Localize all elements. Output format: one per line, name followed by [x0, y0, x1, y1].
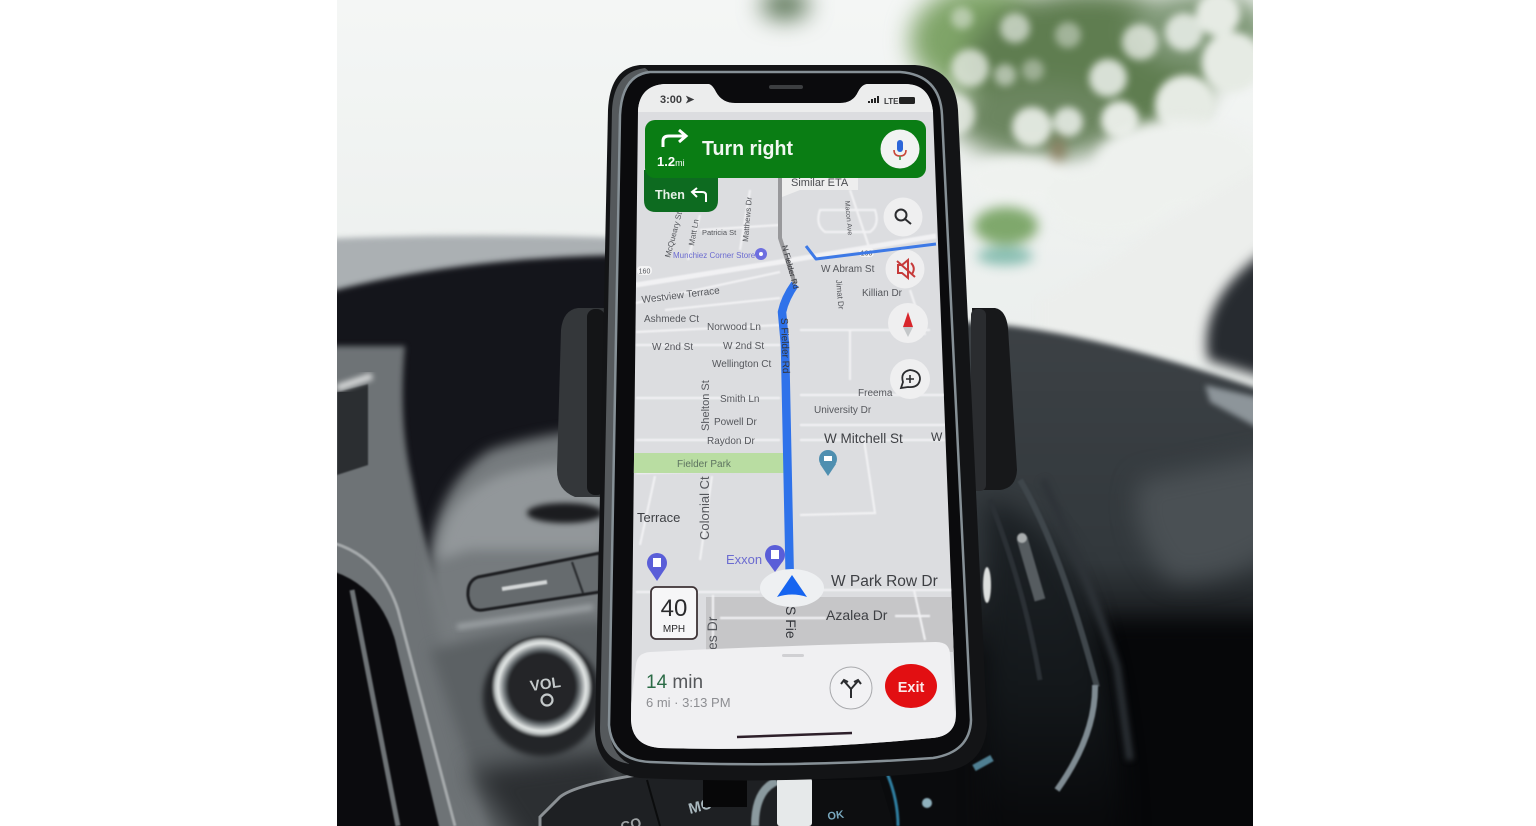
route name labels	[781, 245, 800, 638]
volume knob	[483, 636, 601, 756]
map labels: W 2nd St	[723, 341, 764, 352]
map labels: Norwood Ln	[707, 322, 761, 333]
phone notch speaker	[769, 85, 803, 89]
center console panel	[300, 346, 620, 826]
charging cable	[777, 778, 812, 826]
map control: add report	[890, 359, 930, 399]
lower console buttons	[540, 773, 932, 826]
route line	[780, 178, 936, 588]
pin: Exxon	[765, 545, 785, 572]
map labels: Matthews Dr	[741, 196, 754, 242]
map labels: Shelton St	[700, 380, 712, 431]
map labels: Jimat Dr	[834, 279, 846, 310]
map labels: W Mitchell St	[824, 431, 903, 446]
trip details panel: 6 mi · 3:13 PM	[646, 695, 731, 710]
phone holder: right grip	[971, 308, 1017, 491]
status bar	[638, 84, 933, 112]
background: blurred sky	[337, 0, 1253, 420]
turn banner: Turn right	[702, 138, 793, 160]
trip details panel	[625, 642, 958, 750]
background: blurred trees	[761, 0, 1270, 265]
phone side highlight	[600, 68, 650, 764]
lower console buttons: MC	[687, 795, 714, 818]
map labels: W Park Row Dr	[831, 573, 938, 590]
phone bezel	[609, 72, 971, 764]
exit button: Exit	[898, 680, 924, 696]
left cowl highlight	[337, 232, 606, 293]
gray block at bottom	[706, 597, 956, 652]
map labels: W Abram St	[821, 264, 875, 275]
map labels: Fielder Park	[677, 459, 732, 470]
map labels: Exxon	[726, 552, 762, 567]
map labels: Terrace	[637, 510, 680, 525]
map base	[625, 80, 960, 750]
speed limit sign	[651, 587, 697, 639]
map labels: Wellington Ct	[712, 359, 772, 370]
route name labels: S Fielder Rd	[778, 318, 791, 374]
current position marker	[760, 569, 824, 607]
map labels: Matt Ln	[687, 219, 701, 246]
air vent	[974, 480, 1130, 790]
map labels: es Dr	[704, 616, 720, 650]
highway shields: 160	[861, 250, 872, 258]
speed limit sign: MPH	[663, 624, 685, 635]
map control: search	[884, 198, 922, 236]
map labels: Azalea Dr	[826, 607, 888, 623]
speed limit sign: 40	[661, 595, 687, 622]
map labels: Powell Dr	[714, 417, 757, 428]
route name labels: N Fielder Rd	[780, 244, 800, 290]
status bar: 3:00 ➤	[660, 94, 695, 106]
phone holder: bottom mount	[703, 780, 747, 807]
background: car mirror	[1196, 248, 1253, 384]
volume knob: VOL	[529, 674, 562, 695]
left cowl shadow	[337, 251, 605, 582]
alternate routes button	[830, 667, 872, 709]
park	[633, 453, 786, 473]
route name labels: S Fie	[783, 606, 799, 639]
pin: school	[819, 450, 837, 476]
right dashboard surface	[616, 318, 1253, 826]
right dashboard shading	[979, 382, 1253, 734]
trip details panel: 14 min	[646, 672, 703, 693]
phone holder: left grip	[557, 308, 605, 497]
then-turn banner	[644, 170, 718, 212]
map labels: Killian Dr	[862, 288, 903, 299]
exit button	[885, 664, 937, 708]
then-turn banner: Then	[655, 188, 685, 202]
map labels: Patricia St	[702, 228, 737, 237]
phone case	[595, 65, 987, 780]
map labels: Westview Terrace	[641, 285, 721, 306]
console button	[468, 553, 600, 610]
photo: car dashboard background	[300, 0, 1290, 826]
home indicator	[737, 733, 852, 737]
map labels: Freema	[858, 388, 893, 399]
map labels: Raydon Dr	[707, 436, 755, 447]
pin: Munchiez	[755, 248, 767, 260]
map labels: Colonial Ct	[697, 476, 712, 540]
highway shields: 160	[639, 268, 650, 276]
highway shields	[637, 248, 874, 276]
similar ETA tag: Similar ETA	[791, 177, 849, 189]
map control: mute	[886, 250, 924, 288]
map labels: Macon Ave	[843, 201, 853, 236]
turn banner	[645, 120, 926, 178]
phone screen	[625, 80, 960, 750]
similar ETA tag	[782, 176, 858, 197]
map labels: Ashmede Ct	[644, 314, 699, 325]
pin: left gas	[647, 553, 667, 581]
map labels: W 2nd St	[652, 342, 693, 353]
map labels: University Dr	[814, 405, 872, 416]
map control: compass	[888, 303, 928, 343]
map labels: Smith Ln	[720, 394, 759, 405]
map labels: Munchiez Corner Store	[673, 251, 756, 260]
background: white car body	[1040, 150, 1290, 380]
lower console buttons: OK	[827, 809, 845, 823]
map labels: W	[931, 430, 943, 444]
status bar: LTE	[884, 97, 899, 106]
turn banner: 1.2mi	[657, 154, 685, 169]
map labels: McQueary St	[663, 210, 684, 259]
map labels	[637, 196, 943, 650]
map roads	[636, 190, 960, 650]
